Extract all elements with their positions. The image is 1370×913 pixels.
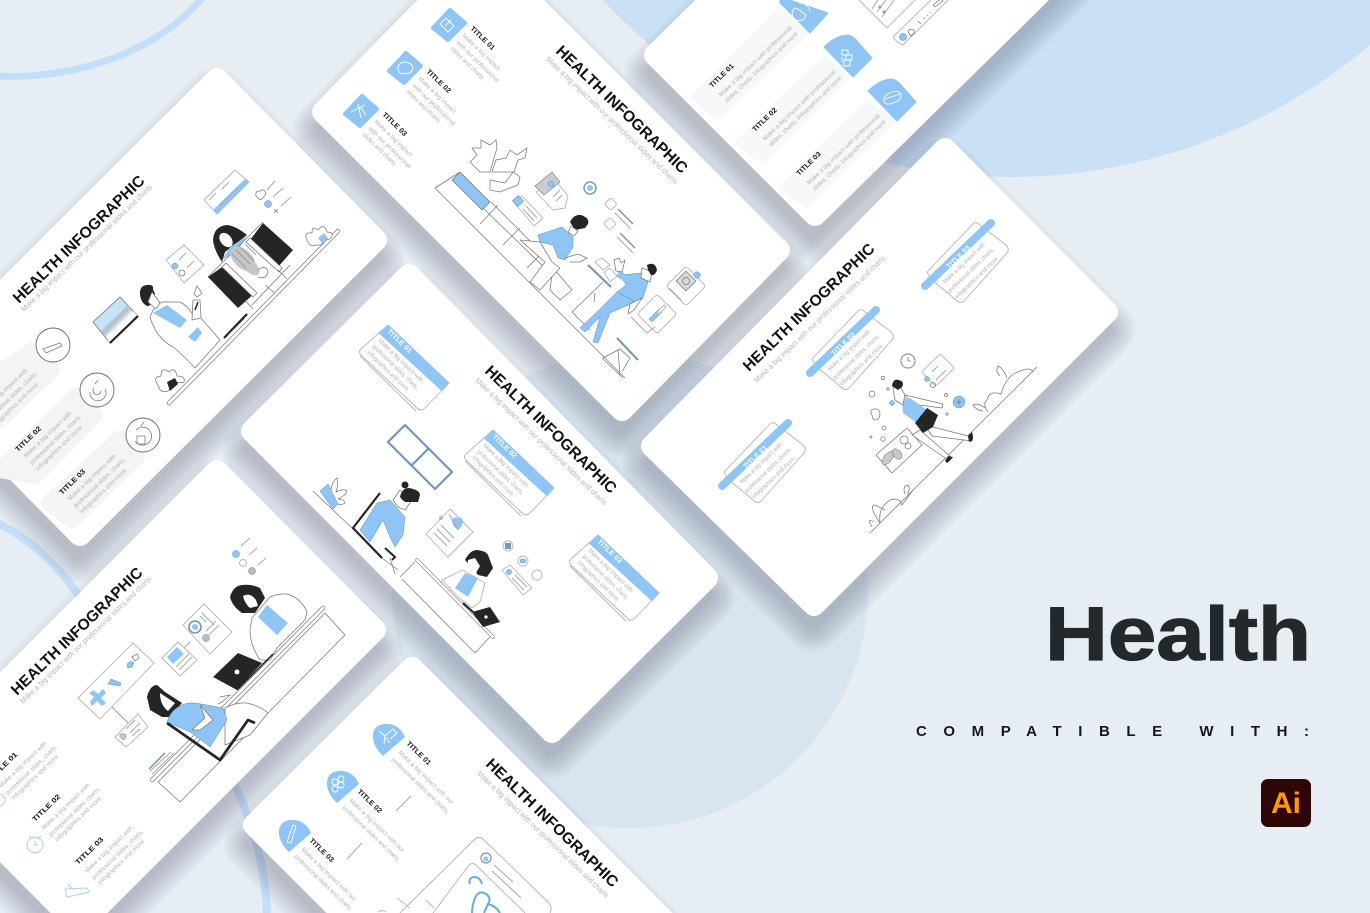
illustration: patient and doctor at desk bbox=[313, 478, 542, 653]
card shadow bbox=[0, 97, 375, 553]
heading: HEALTH INFOGRAPHIC bbox=[740, 240, 878, 375]
heading: HEALTH INFOGRAPHIC bbox=[552, 43, 691, 177]
illustration: runner with food icons bbox=[869, 354, 1037, 533]
callout 3 bbox=[925, 223, 1008, 302]
panel: slide with dome icons bbox=[253, 668, 709, 913]
card background bbox=[254, 668, 709, 913]
panel: slide with consultation bbox=[251, 275, 707, 750]
callout 3: Make a big impact with bbox=[587, 548, 634, 594]
item 3 text: professional slides, charts, bbox=[91, 829, 145, 881]
callout 1 bbox=[360, 325, 449, 411]
item 2 text: professional slides, charts, bbox=[48, 786, 102, 838]
dome icons bbox=[279, 724, 405, 852]
title: Health: Health bbox=[1045, 592, 1311, 677]
illustration: doctor and x-ray bbox=[93, 170, 338, 403]
background circle: centre bbox=[392, 352, 868, 828]
panel: slide with x-ray bbox=[0, 79, 376, 553]
card background bbox=[0, 471, 375, 913]
card shadow bbox=[322, 0, 778, 428]
item 2 text bbox=[32, 783, 103, 843]
callout 3: Make a big impact with bbox=[942, 242, 987, 285]
item 2 text: professional slides, charts, bbox=[29, 414, 83, 466]
item 1 text: slides, charts, infographics and more bbox=[724, 31, 800, 104]
card shadow bbox=[253, 686, 708, 913]
illustration: two doctors in a clinic bbox=[435, 140, 706, 378]
item 1 text: Make a big impact with professional bbox=[718, 25, 794, 98]
item 3 text: Make a big impact with our bbox=[300, 847, 357, 903]
item 3 text: professional slides, charts, bbox=[73, 457, 127, 509]
item 3 text: slides, charts, infographics and more bbox=[812, 119, 888, 192]
callout 3 bbox=[570, 535, 659, 621]
card background bbox=[323, 0, 779, 410]
item 2 text bbox=[15, 411, 84, 472]
subheading: Make a big impact with our professional slides and charts bbox=[474, 376, 609, 507]
panel: slide with two doctors bbox=[322, 0, 779, 428]
callout 2: infographics and more bbox=[471, 455, 515, 498]
subheading: Make a big impact with our professional slides and charts bbox=[752, 253, 887, 384]
item 3 text: TITLE 03 bbox=[59, 468, 87, 496]
item 1 text: TITLE 01 bbox=[405, 740, 432, 767]
card shadow bbox=[0, 489, 374, 913]
item 1 text: professional slides, charts, bbox=[5, 744, 59, 796]
subheading: Make a big impact with our professional slides and charts bbox=[545, 55, 680, 186]
callout 1: professional slides, charts, bbox=[371, 344, 420, 392]
tab glyphs bbox=[792, 3, 901, 104]
item 2 text: Make a big impact with our bbox=[348, 798, 405, 854]
tab icons bbox=[780, 0, 916, 121]
icon tiles bbox=[345, 10, 465, 126]
item 3 text: TITLE 03 bbox=[308, 837, 335, 864]
item 3 text: TITLE 03 bbox=[75, 836, 105, 866]
card shadow bbox=[651, 167, 1106, 623]
item 3 text bbox=[361, 111, 413, 170]
item 2 text: slides, charts, infographics and more bbox=[768, 75, 844, 148]
item 3 text: Make a big impact with professional bbox=[806, 113, 882, 186]
card background bbox=[655, 0, 1135, 215]
item 1 text: slides and charts. bbox=[449, 46, 486, 83]
tile glyphs bbox=[351, 18, 454, 118]
item 3 text: infographics and more bbox=[79, 468, 128, 515]
item 3 text: Make a big impact bbox=[373, 119, 413, 158]
panel: slide with tabs (top right) bbox=[654, 0, 1135, 233]
callout 2 bbox=[810, 310, 893, 390]
callout 2: infographics and more bbox=[839, 343, 885, 387]
callout 2: Make a big impact with bbox=[827, 329, 872, 372]
subheading: Make a big impact with our professional slides and charts bbox=[18, 574, 153, 705]
icon: Adobe Illustrator: Ai bbox=[1271, 787, 1301, 820]
heading: HEALTH INFOGRAPHIC bbox=[10, 172, 148, 307]
label: compatible with: COMPATIBLE WITH: bbox=[916, 723, 1309, 740]
panel: slide with patient consult bbox=[0, 471, 375, 913]
illustration fragment: device widgets bbox=[857, 0, 950, 45]
item 2 text: TITLE 02 bbox=[752, 107, 779, 133]
list backgrounds bbox=[0, 350, 137, 520]
callout 3: professional slides, charts, bbox=[581, 554, 630, 602]
heading: HEALTH INFOGRAPHIC bbox=[482, 756, 621, 891]
callout 1 bbox=[722, 423, 805, 502]
callout 2: professional slides, charts, bbox=[476, 449, 525, 497]
item 1 text: TITLE 01 bbox=[709, 63, 736, 89]
item 2 text: infographics and more bbox=[54, 796, 103, 843]
callout 3: TITLE 03 bbox=[596, 538, 623, 565]
item 1 text: Make a big impact with our bbox=[397, 750, 454, 806]
item 1 text: professional slides and charts. bbox=[390, 757, 450, 816]
callout 3: infographics and more bbox=[954, 256, 1000, 300]
item 1 text: TITLE 01 bbox=[469, 25, 496, 52]
callout 3: professional slides, charts, bbox=[947, 247, 996, 294]
item 3 text: slides and charts. bbox=[361, 132, 398, 169]
background arc: bottom left bbox=[0, 522, 267, 913]
item 2 text: Make a big impact with professional bbox=[762, 69, 838, 142]
item 3 text: with our professional bbox=[366, 125, 412, 170]
list strips bbox=[690, 7, 897, 209]
card background bbox=[252, 275, 707, 732]
circle glyphs bbox=[43, 343, 152, 445]
item 2 text: Make a big impact bbox=[417, 76, 457, 115]
item 2 text: professional slides and charts. bbox=[341, 805, 401, 864]
item 2 text: with our professional bbox=[410, 82, 456, 127]
panel: slide with runner bbox=[651, 149, 1107, 623]
subheading: Make a big impact with our professional slides and charts bbox=[19, 182, 154, 313]
callout 1: TITLE 01 bbox=[386, 328, 413, 355]
callout 1: professional slides, charts, bbox=[744, 447, 793, 494]
item 2 text: slides and charts. bbox=[405, 89, 442, 126]
item 1 text: infographics and more bbox=[11, 754, 60, 801]
background arc: top left bbox=[0, 0, 203, 76]
card shadow bbox=[654, 0, 1134, 233]
illustration: doctor and patient at desk bbox=[78, 538, 345, 802]
callout 1: infographics and more bbox=[366, 350, 410, 393]
callout 2: professional slides, charts, bbox=[832, 334, 881, 381]
item 2 text bbox=[405, 68, 457, 127]
item 3 text: TITLE 03 bbox=[796, 151, 823, 177]
dome glyphs bbox=[287, 729, 397, 843]
item 1 text: Make a big impact bbox=[461, 33, 501, 72]
callout 1: Make a big impact with bbox=[739, 442, 784, 485]
item 3 text: Make a big impact with bbox=[67, 454, 117, 502]
callout 3: infographics and more bbox=[576, 560, 620, 603]
callout 3: TITLE 03 bbox=[946, 244, 972, 270]
callout 2: TITLE 02 bbox=[831, 331, 857, 357]
item 3 text: TITLE 03 bbox=[381, 111, 408, 138]
item 1 text: with our professional bbox=[454, 39, 500, 84]
card background bbox=[652, 149, 1107, 605]
item 2 text: TITLE 02 bbox=[32, 793, 62, 823]
item 3 text: infographics and more bbox=[97, 839, 146, 886]
callout 1: TITLE 01 bbox=[743, 444, 769, 470]
item icons bbox=[0, 794, 89, 897]
illustration: device with anatomy bbox=[378, 838, 551, 913]
heading: HEALTH INFOGRAPHIC bbox=[8, 564, 146, 699]
item 2 text: TITLE 02 bbox=[425, 68, 452, 95]
item 2 text: TITLE 02 bbox=[15, 425, 43, 453]
callout 1: Make a big impact with bbox=[377, 338, 424, 384]
item 2 text: Make a big impact with bbox=[23, 411, 73, 459]
icon: Adobe Illustrator bbox=[1261, 779, 1311, 827]
item 1 text bbox=[449, 25, 501, 84]
card background bbox=[0, 79, 376, 535]
illustration: window bbox=[388, 425, 452, 489]
callout 2 bbox=[464, 430, 554, 516]
item 3 text bbox=[59, 454, 128, 515]
item 3 text bbox=[75, 826, 146, 886]
item 2 text: infographics and more bbox=[35, 425, 84, 472]
card shadow bbox=[251, 293, 706, 750]
background circle: top right bbox=[453, 0, 1370, 177]
divider lines bbox=[347, 796, 411, 859]
callout 2: TITLE 02 bbox=[491, 433, 518, 460]
item 2 text: TITLE 02 bbox=[356, 788, 383, 815]
callout 1: infographics and more bbox=[751, 456, 797, 500]
item 3 text: professional slides and charts. bbox=[293, 854, 353, 913]
icon circles bbox=[36, 328, 160, 452]
subheading: Make a big impact with our professional slides and charts bbox=[476, 769, 611, 900]
item 2 text: Make a big impact with bbox=[41, 783, 91, 831]
callout 2: Make a big impact with bbox=[482, 443, 529, 489]
heading: HEALTH INFOGRAPHIC bbox=[481, 363, 620, 497]
item 3 text: Make a big impact with bbox=[84, 826, 134, 874]
